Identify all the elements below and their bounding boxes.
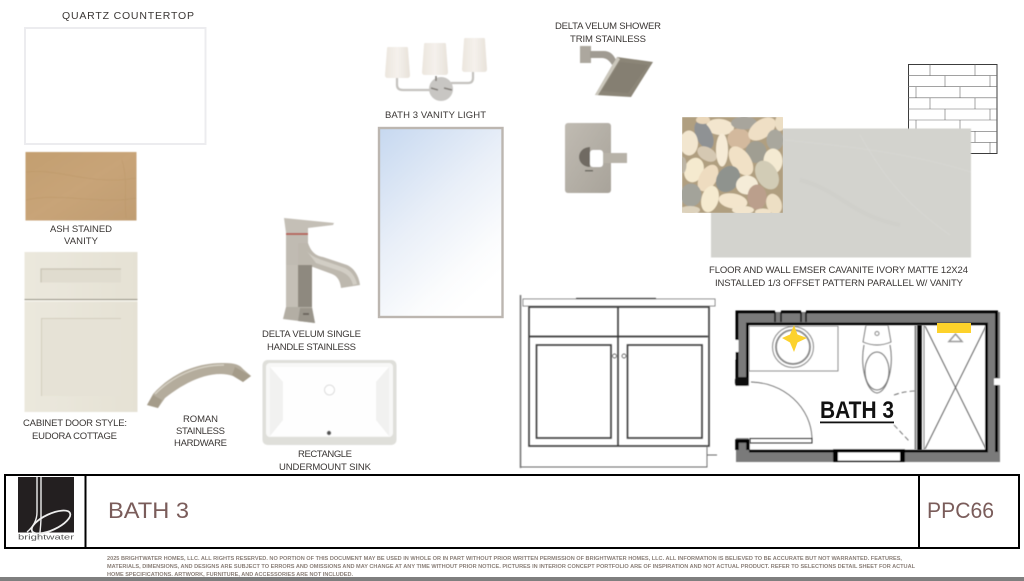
logo: brightwater: brightwater xyxy=(18,532,75,542)
panel: vanity elevation drawing xyxy=(520,295,717,468)
icon: three-shade vanity light xyxy=(385,38,487,101)
panel: ash stained vanity sample xyxy=(26,152,136,247)
label: bath 3 vanity light: BATH 3 VANITY LIGHT xyxy=(385,110,486,121)
label: cabinet door style: CABINET DOOR STYLE: xyxy=(23,418,127,429)
logo: brightwater xyxy=(18,477,75,542)
icon: cabinet pull xyxy=(147,363,251,408)
panel: quartz countertop sample xyxy=(25,10,206,144)
floor plan room label: BATH 3 xyxy=(820,397,894,424)
room name: BATH 3 xyxy=(108,498,189,523)
panel: rectangle undermount sink xyxy=(262,360,396,473)
label: delta velum shower trim stainless: TRIM STAINLESS xyxy=(570,34,646,45)
panel: floor and wall tile sample xyxy=(709,128,971,289)
label: rectangle undermount sink: RECTANGLE xyxy=(298,449,352,460)
label: rectangle undermount sink: UNDERMOUNT SINK xyxy=(279,462,372,473)
icon: shower head xyxy=(580,46,653,97)
panel: pebble tile sample xyxy=(682,117,783,213)
label: roman stainless hardware xyxy=(174,414,227,449)
label: roman stainless hardware: STAINLESS xyxy=(176,426,225,437)
label: roman stainless hardware: ROMAN xyxy=(183,414,218,425)
legal disclaimer: 2025 BRIGHTWATER HOMES, LLC. ALL RIGHTS RESERVED. NO PORTION OF THIS DOCUMENT MAY BE USED IN WHOLE OR IN PART WITHOUT PRIOR WRITTEN PERMISSION OF BRIGHTWATER HOMES, LLC. ALL INFORMATION IS BELIEVED TO BE ACCURATE BUT NOT WARRANTED. FEATURES, xyxy=(107,556,902,562)
floor plan highlight: sink marker xyxy=(782,325,807,352)
legal disclaimer: HOME SPECIFICATIONS. ARTWORK, FURNITURE, AND ACCESSORIES ARE NOT INCLUDED. xyxy=(107,572,353,578)
panel: roman stainless hardware xyxy=(147,363,251,449)
plan code: PPC66 xyxy=(927,498,994,523)
label: floor and wall tile description xyxy=(709,265,968,289)
panel: delta velum faucet xyxy=(262,218,361,353)
label: ash stained vanity xyxy=(50,224,112,247)
icon: single handle faucet xyxy=(283,218,360,323)
icon: undermount sink xyxy=(262,360,396,445)
label: delta velum shower trim stainless: DELTA VELUM SHOWER xyxy=(555,21,661,32)
panel: tile layout diagram xyxy=(908,64,997,154)
icon: shower valve trim xyxy=(565,123,627,193)
walls xyxy=(736,312,1000,462)
label: floor and wall tile description: FLOOR AND WALL EMSER CAVANITE IVORY MATTE 12X24 xyxy=(709,265,968,276)
panel: cabinet door style xyxy=(23,252,138,442)
bottom grey band xyxy=(0,577,1024,581)
label: roman stainless hardware: HARDWARE xyxy=(174,438,227,449)
floor plan fixtures xyxy=(749,325,986,450)
label: delta velum single handle stainless: DELTA VELUM SINGLE xyxy=(262,329,361,340)
label: rectangle undermount sink xyxy=(279,449,372,473)
title block xyxy=(5,475,1019,548)
label: floor and wall tile description: INSTALLED 1/3 OFFSET PATTERN PARALLEL W/ VANITY xyxy=(715,278,964,289)
label: quartz countertop: QUARTZ COUNTERTOP xyxy=(62,10,194,22)
label: delta velum single handle stainless: HANDLE STAINLESS xyxy=(267,342,356,353)
label: cabinet door style: EUDORA COTTAGE xyxy=(32,431,117,442)
label: ash stained vanity: VANITY xyxy=(64,236,99,247)
panel: delta velum shower trim xyxy=(555,21,661,193)
panel: bath 3 vanity light xyxy=(385,38,487,121)
label: ash stained vanity: ASH STAINED xyxy=(50,224,112,235)
label: delta velum single handle stainless xyxy=(262,329,361,353)
panel: bath 3 floor plan xyxy=(734,312,1001,462)
legal disclaimer: MATERIALS, DIMENSIONS, AND DESIGNS ARE SUBJECT TO ERRORS AND OMISSIONS AND MAY CHANGE AT ANY TIME WITHOUT PRIOR NOTICE. PICTURES IN INTERIOR CONCEPT PORTFOLIO ARE OF INSPIRATION AND NOT ACTUAL PRODUCT. REFER TO SELECTIONS DETAIL SHEET FOR ACTUAL xyxy=(107,564,916,570)
panel: mirror xyxy=(379,128,502,317)
label: cabinet door style xyxy=(23,418,127,442)
legal disclaimer xyxy=(107,556,916,578)
floor plan highlight: shower marker xyxy=(937,323,971,333)
label: delta velum shower trim stainless xyxy=(555,21,661,45)
